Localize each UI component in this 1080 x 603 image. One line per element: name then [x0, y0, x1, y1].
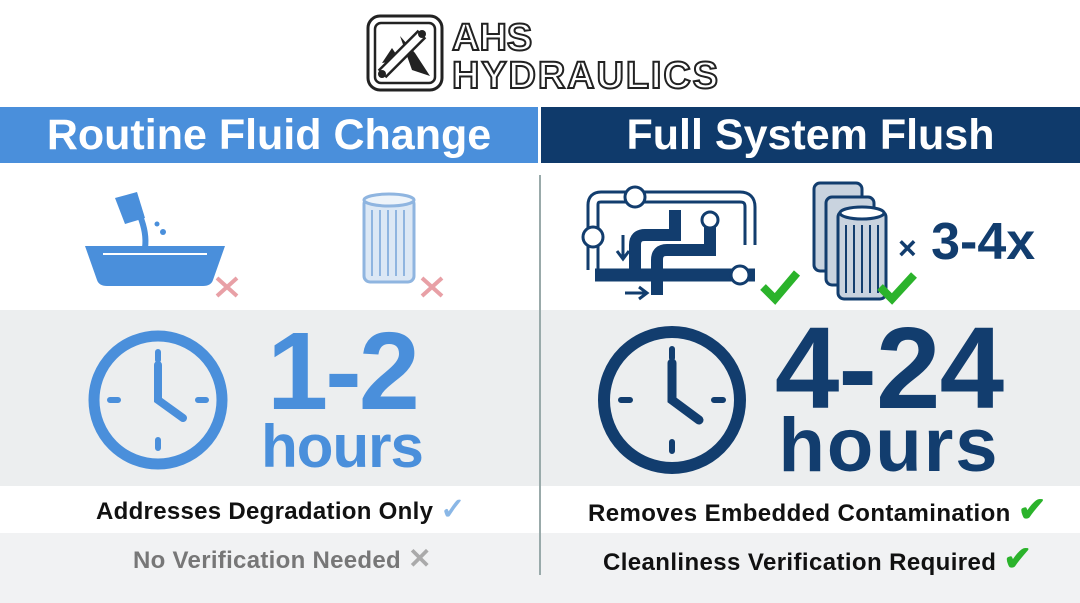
text: removes contamination: Removes Embedded Contamination ✔	[588, 491, 1047, 529]
stat: 4-24 hours: hours	[778, 403, 1000, 488]
text: no verification: No Verification Needed ✕	[133, 543, 432, 574]
divider	[539, 175, 541, 575]
icon: filters x3 with check	[812, 182, 917, 305]
header: full system flush: Full System Flush	[627, 111, 994, 159]
logo	[366, 14, 718, 96]
logo: HYDRAULICS	[452, 55, 718, 96]
stat: 4-24 hours: 4-24	[775, 303, 1003, 433]
stat: 1-2 hours	[261, 310, 423, 480]
logo: AHS	[452, 17, 532, 59]
stat: 1-2 hours: hours	[261, 413, 423, 480]
icon: pipe network with check	[582, 186, 800, 305]
icon: clock dark	[598, 326, 746, 474]
icon: clock light	[88, 330, 228, 470]
text: verification required: Cleanliness Verification Required ✔	[603, 540, 1032, 578]
multiplier label: × 3-4x	[898, 213, 1035, 271]
stat: 1-2 hours: 1-2	[267, 310, 417, 433]
text: addresses degradation: Addresses Degradation Only ✓	[96, 493, 466, 526]
header: routine fluid change: Routine Fluid Change	[47, 111, 491, 159]
background bands	[0, 310, 1080, 486]
header: full system flush	[541, 107, 1080, 163]
icon: pouring basin	[85, 192, 238, 298]
icon: filter with x	[362, 192, 444, 298]
